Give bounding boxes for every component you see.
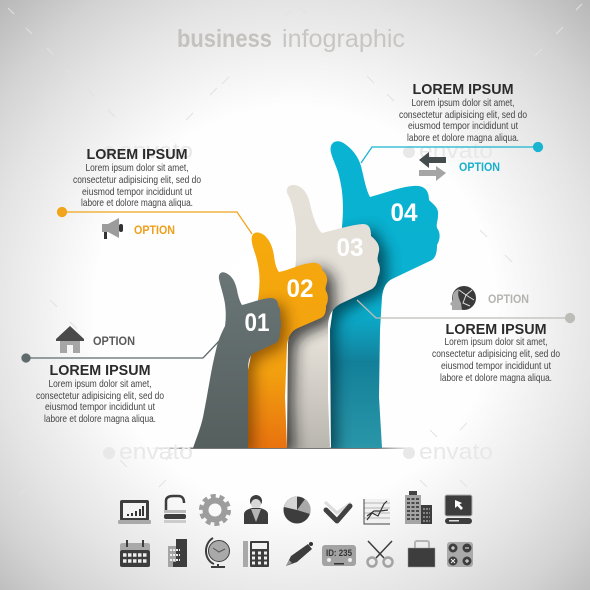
- text block: step 04: [399, 81, 527, 144]
- text block: step 03: consectetur adipisicing elit, sed do: [432, 348, 560, 360]
- text block: step 03: Lorem ipsum dolor sit amet,: [444, 336, 548, 348]
- text block: step 02: Lorem ipsum dolor sit amet,: [86, 162, 188, 174]
- text block: step 03: LOREM IPSUM: [446, 321, 546, 338]
- option: step 04: OPTION: [459, 162, 500, 174]
- text block: step 01: LOREM IPSUM: [50, 362, 150, 379]
- option: step 01: OPTION: [93, 336, 135, 348]
- option: step 04: [419, 152, 500, 181]
- icon: line graph: [364, 499, 390, 524]
- text block: step 03: eiusmod tempor incididunt ut: [441, 360, 551, 372]
- icon: office towers: [405, 491, 432, 524]
- hand 04 teal: [330, 141, 440, 448]
- title: business: [177, 25, 272, 53]
- text block: step 04: eiusmod tempor incididunt ut: [408, 120, 518, 132]
- watermarks: envato: [419, 138, 493, 163]
- option: step 03: OPTION: [488, 294, 529, 306]
- icon: id card: ID: 235: [326, 548, 352, 558]
- hand 03 cream: [286, 185, 380, 448]
- connector: step 03: [357, 300, 574, 322]
- icon: check mark: [325, 502, 351, 521]
- icon: pie chart: [284, 496, 311, 524]
- option: step 03: [450, 286, 529, 310]
- icon: laptop: [118, 500, 151, 524]
- text block: step 01: consectetur adipisicing elit, sed do: [36, 390, 164, 402]
- icon: business person: [244, 495, 268, 524]
- text block: step 02: LOREM IPSUM: [86, 146, 188, 163]
- text block: step 01: [36, 362, 164, 425]
- text block: step 02: eiusmod tempor incididunt ut: [82, 186, 192, 198]
- icon: calculator: [243, 541, 269, 567]
- text block: step 02: labore et dolore magna aliqua.: [81, 197, 193, 209]
- title: infographic: [282, 25, 405, 53]
- icon row 2: [120, 538, 473, 567]
- icon: pen: [286, 542, 313, 566]
- text block: step 04: consectetur adipisicing elit, sed do: [399, 109, 527, 121]
- text block: step 01: eiusmod tempor incididunt ut: [45, 401, 155, 413]
- connector: step 01: [22, 338, 222, 362]
- text block: step 02: consectetur adipisicing elit, sed do: [73, 174, 201, 186]
- connector: step 02: [58, 208, 252, 234]
- watermarks: [103, 138, 493, 464]
- hand 01 grey: 01: [244, 309, 270, 337]
- text block: step 03: [432, 321, 560, 384]
- icon: open lock: [164, 496, 186, 523]
- text block: step 01: labore et dolore magna aliqua.: [44, 413, 156, 425]
- text block: step 04: labore et dolore magna aliqua.: [407, 132, 519, 144]
- text block: step 02: [73, 146, 201, 209]
- hand 03 cream: 03: [336, 234, 364, 262]
- watermarks: envato: [419, 439, 493, 464]
- option: step 02: OPTION: [134, 225, 175, 237]
- icon: math operators: [447, 542, 473, 567]
- watermarks: envato: [119, 439, 193, 464]
- text block: step 01: Lorem ipsum dolor sit amet,: [48, 378, 152, 390]
- hand 02 orange: 02: [286, 275, 314, 303]
- icon row 1: [118, 491, 472, 524]
- icon: scissors: [368, 541, 392, 566]
- icon: computer with cursor: [445, 495, 472, 524]
- icon: id card: [322, 545, 356, 566]
- text block: step 04: LOREM IPSUM: [412, 81, 514, 98]
- text block: step 03: labore et dolore magna aliqua.: [440, 372, 552, 384]
- icon: briefcase: [408, 541, 435, 567]
- title: [177, 25, 405, 53]
- option: step 02: [102, 218, 175, 239]
- option: step 01: [56, 326, 135, 353]
- icon: calendar: [120, 540, 150, 567]
- connector: step 04: [361, 142, 542, 163]
- icon: gear: [201, 496, 229, 524]
- hand 04 teal: 04: [390, 199, 418, 227]
- text block: step 04: Lorem ipsum dolor sit amet,: [412, 97, 514, 109]
- icon: office building: [168, 539, 187, 567]
- icon: globe: [206, 538, 230, 567]
- hand 02 orange: [248, 232, 328, 448]
- hand 01 grey: [193, 272, 281, 448]
- watermarks: envato: [119, 138, 193, 163]
